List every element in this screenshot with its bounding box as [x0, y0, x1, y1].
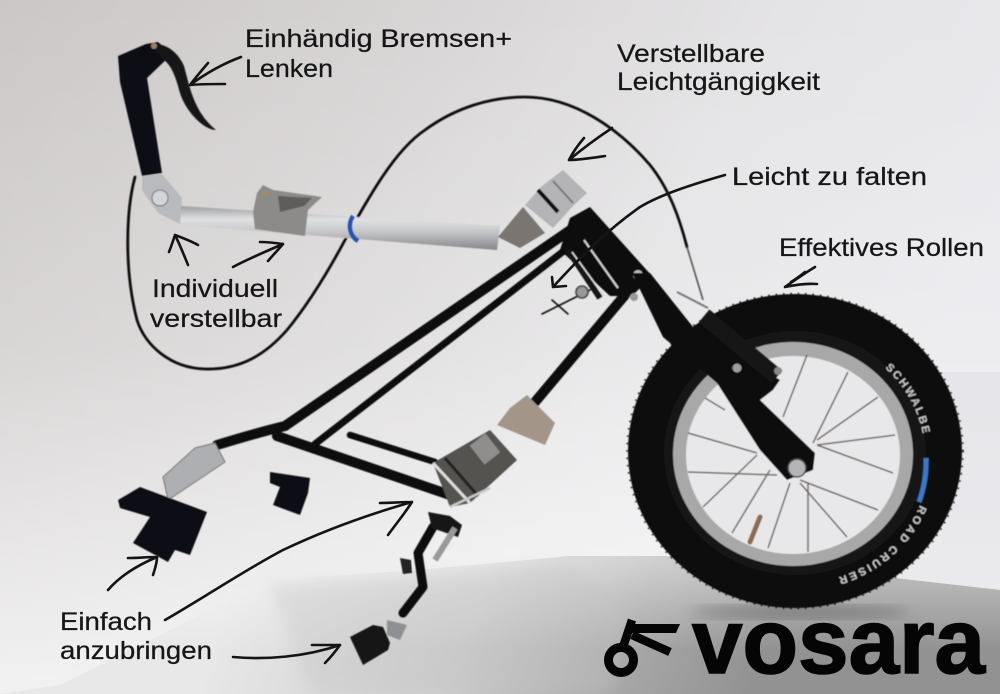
arrow: to tire	[785, 267, 817, 287]
arrow: to joint	[169, 235, 198, 265]
arrow: to grey clamp	[233, 242, 283, 267]
aluminium tube	[180, 206, 500, 250]
adjuster joint	[142, 174, 182, 224]
foot support	[350, 512, 462, 665]
spokes	[688, 355, 895, 552]
frame	[217, 207, 652, 495]
bike	[117, 41, 965, 666]
lower thin tube	[315, 250, 565, 444]
tire lettering: ROAD CRUISER	[838, 504, 928, 585]
label: Einhändig Bremsen+ Lenken: Lenken	[245, 55, 333, 83]
middle clamp	[270, 472, 310, 515]
tire lettering: SCHWALBE	[885, 362, 931, 434]
left clamp arm	[163, 443, 225, 500]
label: Einfach anzubringen: anzubringen	[60, 637, 212, 665]
bottom tube	[277, 436, 450, 495]
label: Verstellbare Leichtgängigkeit: Verstellbare	[617, 40, 765, 68]
main tube	[217, 222, 582, 445]
down tube	[535, 295, 625, 402]
valve	[750, 517, 760, 542]
arrow: to left clamp	[108, 557, 157, 590]
brake lever	[150, 44, 216, 130]
background: fabric surface	[0, 556, 1000, 694]
label: Individuell verstellbar: verstellbar	[150, 305, 282, 333]
cross tube	[350, 435, 435, 462]
blue band	[350, 216, 358, 241]
folding mechanism	[433, 430, 517, 507]
label: Individuell verstellbar	[150, 275, 282, 333]
label: Effektives Rollen: Effektives Rollen	[779, 234, 984, 262]
arrow: to head clamp	[569, 128, 612, 160]
label: Individuell verstellbar: Individuell	[152, 275, 278, 303]
left clamp	[118, 487, 207, 562]
label: Einhändig Bremsen+ Lenken: Einhändig Bremsen+	[245, 25, 512, 53]
handle grip	[118, 42, 172, 176]
label: Einhändig Bremsen+ Lenken	[245, 25, 512, 83]
fold mechanism	[542, 286, 590, 314]
head box	[560, 207, 652, 301]
wheel	[596, 262, 965, 649]
label: Einfach anzubringen	[60, 608, 212, 665]
brake cable	[128, 97, 703, 369]
arrow: to brake lever	[190, 57, 241, 85]
rim	[673, 342, 913, 566]
logo icon	[608, 620, 680, 672]
grey quick clamp	[253, 185, 322, 236]
fork	[632, 273, 815, 480]
label: Leicht zu falten: Leicht zu falten	[732, 163, 927, 191]
arrow: to frame	[165, 502, 412, 620]
head clamp	[525, 170, 587, 228]
tire	[627, 294, 963, 608]
tire blue label	[919, 458, 926, 502]
folding latch block	[497, 395, 555, 445]
arrow: to foot	[233, 645, 340, 663]
lever pivot	[151, 43, 157, 49]
logo wordmark: vosara	[692, 591, 986, 693]
arrow: to folding latch	[552, 175, 725, 287]
head clamp plate	[498, 207, 545, 248]
logo: vosara	[608, 591, 986, 693]
label: Einfach anzubringen: Einfach	[60, 608, 152, 636]
axle nut	[788, 459, 806, 477]
tire lettering	[838, 362, 931, 585]
label: Verstellbare Leichtgängigkeit: Leichtgängigkeit	[617, 68, 820, 96]
label: Verstellbare Leichtgängigkeit	[617, 40, 820, 96]
